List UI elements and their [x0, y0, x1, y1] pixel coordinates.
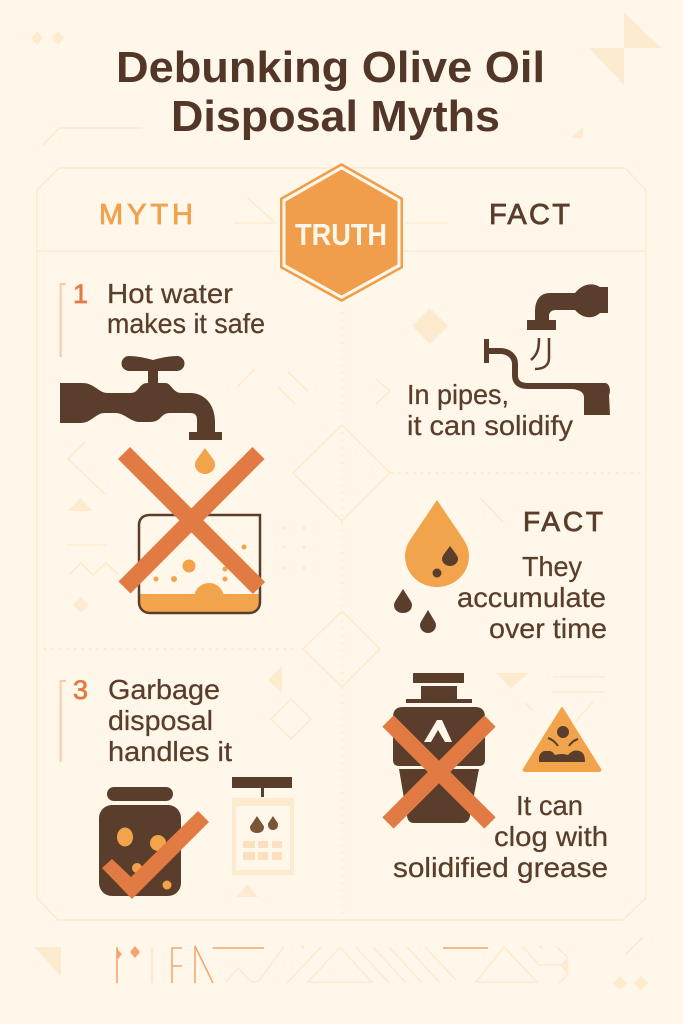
icon: pipe tap	[484, 284, 610, 415]
title: Debunking Olive Oil	[116, 43, 545, 92]
icon: faucet	[60, 356, 222, 440]
icon: garbage disposal unit	[393, 673, 485, 823]
fact 1 text: In pipes,	[407, 379, 509, 410]
fact 2 text: over time	[489, 613, 607, 644]
fact 2 text: accumulate	[457, 582, 606, 613]
myth 1 label: 1	[73, 279, 88, 309]
myth 3 label: Garbage	[108, 674, 220, 705]
icon: disposal unit sign	[232, 777, 294, 875]
icon: oil drops	[394, 500, 469, 633]
icon: jar	[99, 787, 181, 896]
icon: red cross over disposal	[388, 721, 490, 823]
top decorative shapes	[31, 12, 661, 145]
myth 1 label	[61, 278, 265, 357]
fact 3 text: It can	[516, 790, 583, 821]
fact 3 text: clog with	[494, 821, 608, 852]
icon: oil drop falling	[195, 448, 215, 474]
icon: orange check mark	[102, 811, 209, 899]
icon: warning triangle	[524, 708, 600, 771]
fact 2 text: They	[522, 551, 582, 582]
myth 1 label: Hot water	[107, 278, 233, 309]
background decorative shapes	[67, 198, 605, 897]
fact 1 text: it can solidify	[407, 410, 573, 441]
fact 3 text: solidified grease	[393, 852, 608, 883]
fact 2 text	[457, 551, 607, 644]
myth 1 label: makes it safe	[107, 308, 265, 339]
truth hexagon badge: TRUTH	[295, 217, 387, 252]
fact 1 text	[407, 379, 573, 441]
heading: fact: FACT	[489, 199, 570, 231]
icon: red cross over beaker	[124, 453, 259, 588]
bottom decorative glyph band	[34, 937, 648, 990]
heading: fact 2: FACT	[523, 506, 603, 537]
myth 3 label: 3	[73, 675, 88, 705]
title: Disposal Myths	[171, 92, 500, 141]
panel: comparison frame	[37, 168, 646, 920]
myth 3 label	[61, 674, 232, 767]
icon: beaker with oil	[139, 515, 260, 613]
myth 3 label: disposal	[108, 705, 213, 736]
fact 3 text	[393, 790, 608, 883]
title	[116, 43, 545, 141]
heading: myth: MYTH	[99, 199, 193, 231]
myth 3 label: handles it	[108, 736, 232, 767]
truth hexagon badge	[280, 163, 403, 302]
